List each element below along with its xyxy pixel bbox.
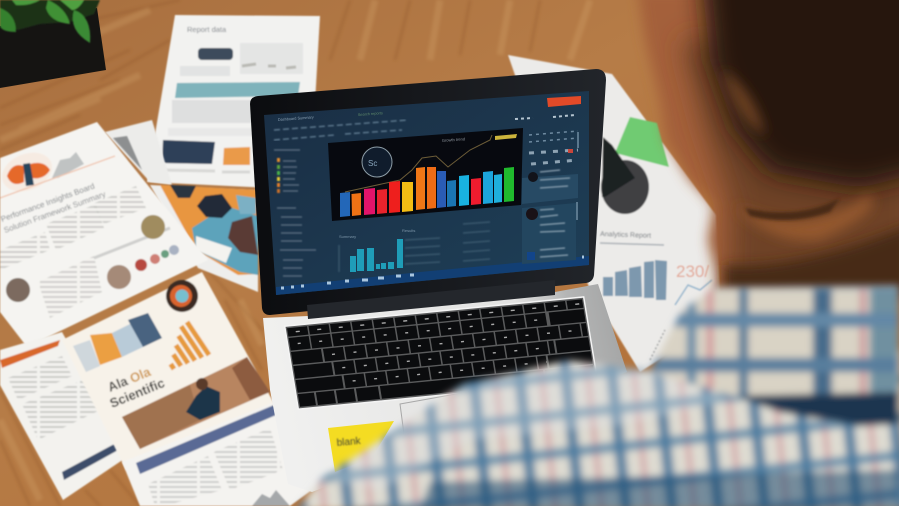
city image: [252, 490, 290, 506]
navy band: [136, 405, 276, 474]
face and neck skin: [638, 0, 899, 300]
heading text: Performance Insights Board: [0, 182, 96, 224]
chart card: [240, 43, 303, 74]
document: grey sheet behind: [105, 120, 172, 185]
keyboard: [285, 297, 597, 409]
sidebar list: [274, 150, 316, 276]
pale fog near edge: [330, 363, 730, 490]
document: bottom sheet: [122, 403, 312, 506]
document: scientific poster: Scientific: [108, 375, 167, 411]
document: hexagon brochure: [150, 185, 258, 292]
trackpad: [400, 388, 492, 442]
header illustration: [0, 146, 58, 198]
hinge: [307, 280, 555, 319]
red button: [547, 96, 581, 107]
large number: 230/: [676, 262, 709, 281]
navy footer band: [62, 442, 120, 480]
poster title: Ala Ola: [106, 364, 153, 395]
mouse pad: [601, 160, 649, 214]
main chart panel: [328, 128, 523, 221]
colour swatches: [73, 340, 100, 372]
lower shirt checks: [290, 350, 899, 506]
sparkline: [675, 280, 712, 305]
hair mid brown layer: [682, 40, 899, 292]
right panel: [522, 131, 578, 264]
colour bars: [340, 167, 514, 217]
lower chart panel: Results: [402, 228, 415, 233]
hair highlights: [722, 70, 765, 135]
text blocks: [0, 232, 50, 270]
avatars: [528, 172, 538, 182]
dark chip: [198, 48, 233, 60]
text columns: [148, 456, 222, 506]
screen: [264, 91, 589, 295]
dark hem band: [420, 470, 899, 506]
screen lid: [250, 69, 606, 315]
stepped bar chart: [171, 322, 209, 369]
orange panel: [223, 147, 250, 165]
document: left lower sheet: [0, 332, 130, 500]
chart title: Growth trend: [442, 136, 465, 143]
trend line: [345, 135, 492, 192]
black device: [602, 137, 635, 197]
person in foreground: [290, 0, 899, 506]
document: top centre report: [147, 15, 320, 190]
screen: Search reports: [358, 111, 383, 117]
green card: [615, 117, 669, 167]
document: scientific poster: [62, 272, 275, 470]
navy panel: [162, 140, 215, 164]
key legends: [296, 304, 592, 386]
poster photo: [122, 357, 270, 449]
grey block: [172, 100, 296, 123]
text lines: [8, 356, 72, 400]
document: left article sheet: [0, 122, 208, 347]
chart logo badge: [362, 147, 392, 177]
hexagon tiles: [170, 185, 196, 198]
upper shoulder panel: [640, 280, 899, 400]
round badge: [166, 280, 198, 312]
plant pot: [0, 8, 106, 88]
document: right chart sheet: [508, 55, 722, 372]
shoulder shadow: [739, 386, 899, 430]
teal band: [175, 82, 300, 98]
plant leaves: [0, 0, 100, 43]
bar chart: [603, 260, 667, 300]
laptop: [250, 69, 627, 492]
laptop base: [263, 284, 627, 492]
plaid shirt: [290, 280, 899, 506]
taskbar: [276, 256, 589, 295]
header text: Report data: [187, 25, 227, 34]
orange tag: [0, 340, 60, 368]
lower chart panel: [339, 222, 490, 272]
yellow tag: [495, 134, 517, 140]
sticky note: [328, 421, 394, 472]
caption: Analytics Report: [600, 231, 651, 240]
hair dark mass: [700, 0, 899, 188]
lower chart panel: Summary: [339, 234, 356, 239]
round photos: [6, 278, 30, 302]
teal bars: [350, 239, 403, 272]
toolbar text: Dashboard Summary: [278, 115, 314, 122]
potted plant: [0, 0, 106, 88]
chart logo badge: Sc: [368, 159, 377, 168]
sticky note: blank: [336, 436, 362, 449]
document: left article sheet: Solution Framework Summary: [3, 190, 107, 235]
